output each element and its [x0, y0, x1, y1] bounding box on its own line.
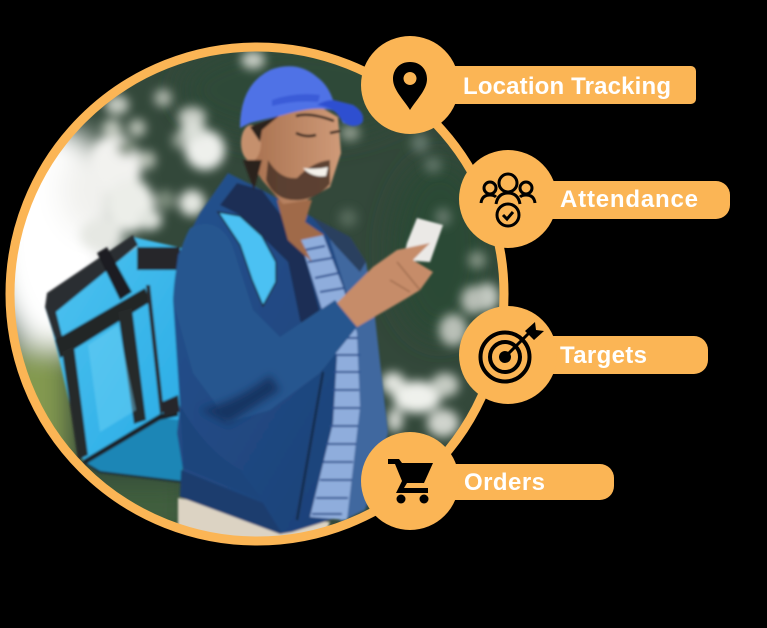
- photo: delivery worker with backpack using a phone: [14, 52, 500, 536]
- beard: [266, 160, 330, 200]
- item: Location Tracking: [361, 36, 696, 134]
- orange ring: [10, 47, 504, 541]
- sleeve: [173, 224, 357, 423]
- trousers: [178, 498, 330, 545]
- head and neck: [241, 105, 341, 262]
- icon: shopping cart: [388, 459, 433, 504]
- icon circle: location: [361, 36, 459, 134]
- label: Orders: Orders: [464, 469, 545, 496]
- label bar: Targets: [530, 336, 708, 374]
- collar dark inner: [220, 182, 320, 323]
- smile: [303, 167, 328, 176]
- label: Targets: Targets: [560, 342, 647, 369]
- icon: map pin: [393, 62, 427, 110]
- item: Attendance: [459, 150, 730, 248]
- backpack: [45, 235, 196, 482]
- shirt: [300, 235, 360, 520]
- zipper: [297, 372, 323, 520]
- waistband: [180, 470, 282, 534]
- blue strap: [218, 212, 276, 306]
- label bar: Orders: [430, 464, 614, 500]
- item: Targets: [459, 306, 708, 404]
- blue cap: [240, 66, 363, 128]
- label bar: Location Tracking: [430, 66, 696, 104]
- label: Attendance: Attendance: [560, 186, 698, 213]
- jacket: [173, 173, 388, 534]
- item: Orders: [361, 432, 614, 530]
- label: Location Tracking: Location Tracking: [463, 73, 671, 100]
- right jacket panel: [330, 237, 388, 522]
- icon: target with arrow: [480, 322, 544, 382]
- hand with phone: [337, 218, 443, 327]
- icon: group with check: [481, 174, 535, 226]
- icon circle: attendance: [459, 150, 557, 248]
- hair: [250, 115, 280, 142]
- icon circle: orders: [361, 432, 459, 530]
- icon circle: targets: [459, 306, 557, 404]
- ear: [241, 125, 261, 161]
- blurred foliage background: [14, 52, 500, 526]
- eyes and brows: [296, 115, 340, 136]
- label bar: Attendance: [530, 181, 730, 219]
